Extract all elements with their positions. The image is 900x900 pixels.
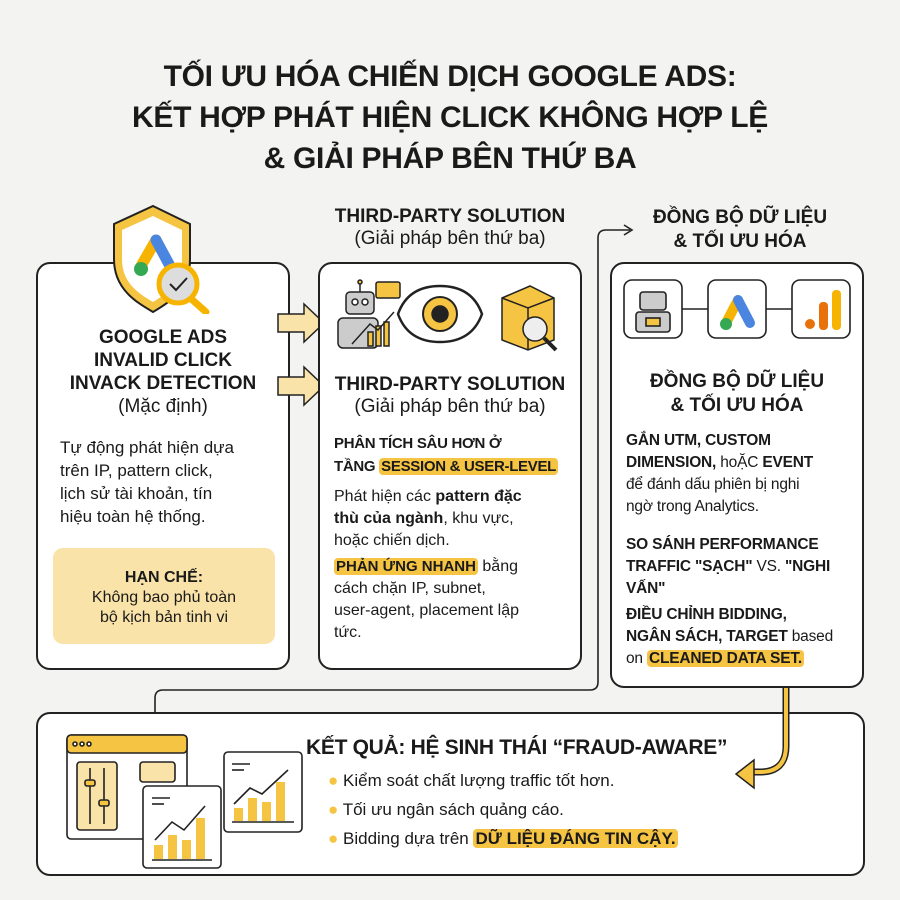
heading: sync [650,369,824,416]
panel: third-party solution [318,262,582,670]
title: TỐI ƯU HÓA CHIẾN DỊCH GOOGLE ADS: [164,60,736,93]
text: compare: TRAFFIC "SẠCH" VS. "NGHI [626,558,830,575]
text: description: trên IP, pattern click, [60,461,213,480]
title: & GIẢI PHÁP BÊN THỨ BA [264,142,636,175]
text: quick response: cách chặn IP, subnet, [334,580,486,597]
list: results: ● Bidding dựa trên DỮ LIỆU ĐÁNG TIN CẬY. [328,829,676,848]
text: description [60,438,234,526]
heading: third-party solution: (Giải pháp bên thứ ba) [354,396,546,417]
heading: third-party solution top [334,206,565,249]
icons: robot, eye, database [337,279,558,352]
text: description: lịch sử tài khoản, tín [60,484,212,503]
heading: sync: ĐỒNG BỘ DỮ LIỆU [650,371,824,392]
text: description: hiệu toàn hệ thống. [60,507,206,526]
text: detection [334,488,522,549]
text: utm: DIMENSION, hoẶC EVENT [626,454,813,471]
text: compare: VẤN" [626,580,665,597]
panel: result [36,712,865,876]
heading: sync top: ĐỒNG BỘ DỮ LIỆU [653,207,827,228]
text: quick response: user-agent, placement lập [334,602,519,619]
list: results [328,771,678,848]
heading: third-party solution [334,374,565,417]
text: utm: ngờ trong Analytics. [626,498,759,515]
text: quick response [334,557,519,641]
text: utm: để đánh dấu phiên bị nghi [626,476,799,493]
heading: result: KẾT QUẢ: HỆ SINH THÁI “FRAUD-AWARE” [306,736,727,759]
heading: google ads: INVALID CLICK [94,350,232,371]
heading: google ads: (Mặc định) [118,396,208,417]
text: detection: hoặc chiến dịch. [334,532,450,549]
arrow: sync to result [734,688,790,790]
icon: shield with google ads logo [113,204,210,314]
icons: robot, ads, analytics [623,279,851,339]
text: utm [626,430,814,515]
panel: data sync [610,262,864,688]
callout: limitation [53,548,275,644]
text: detection: thù của ngành, khu vực, [334,510,514,527]
text: analysis [334,434,558,475]
text: analysis: TẦNG SESSION & USER-LEVEL [334,458,556,475]
text: description: Tự động phát hiện dựa [60,438,234,457]
heading: sync top: & TỐI ƯU HÓA [674,231,806,252]
text: bidding [626,605,833,667]
heading: google ads: INVACK DETECTION [70,373,256,394]
text: bidding: NGÂN SÁCH, TARGET based [626,628,833,645]
title [132,60,768,175]
title: KẾT HỢP PHÁT HIỆN CLICK KHÔNG HỢP LỆ [132,101,768,134]
list: results: ● Kiểm soát chất lượng traffic tốt hơn. [328,771,614,790]
text: quick response: PHẢN ỨNG NHANH bằng [336,558,518,575]
callout: limitation: HẠN CHẾ: [125,569,203,586]
heading: google ads: GOOGLE ADS [99,327,227,348]
text: bidding: ĐIỀU CHỈNH BIDDING, [626,606,787,623]
callout: limitation: Không bao phủ toàn [92,589,236,606]
icon: dashboard and charts [66,734,303,869]
callout: limitation: bộ kịch bản tinh vi [100,609,228,626]
heading: third-party solution top: (Giải pháp bên thứ ba) [354,228,546,249]
heading: third-party solution: THIRD-PARTY SOLUTION [335,374,565,395]
arrow: to third-party top [277,302,318,344]
heading: google ads [70,327,256,417]
heading: third-party solution top: THIRD-PARTY SOLUTION [335,206,565,227]
text: compare: SO SÁNH PERFORMANCE [626,536,819,553]
list: results: ● Tối ưu ngân sách quảng cáo. [328,800,564,819]
text: utm: GẮN UTM, CUSTOM [626,432,771,449]
panel: google ads default [36,262,290,670]
text: compare [626,535,830,597]
arrow: to third-party bottom [277,365,318,407]
text: quick response: tức. [334,624,362,641]
heading: sync top [653,205,827,252]
text: bidding: on CLEANED DATA SET. [626,650,802,667]
text: detection: Phát hiện các pattern đặc [334,488,522,505]
text: analysis: PHÂN TÍCH SÂU HƠN Ở [334,435,501,452]
heading: sync: & TỐI ƯU HÓA [671,395,803,416]
